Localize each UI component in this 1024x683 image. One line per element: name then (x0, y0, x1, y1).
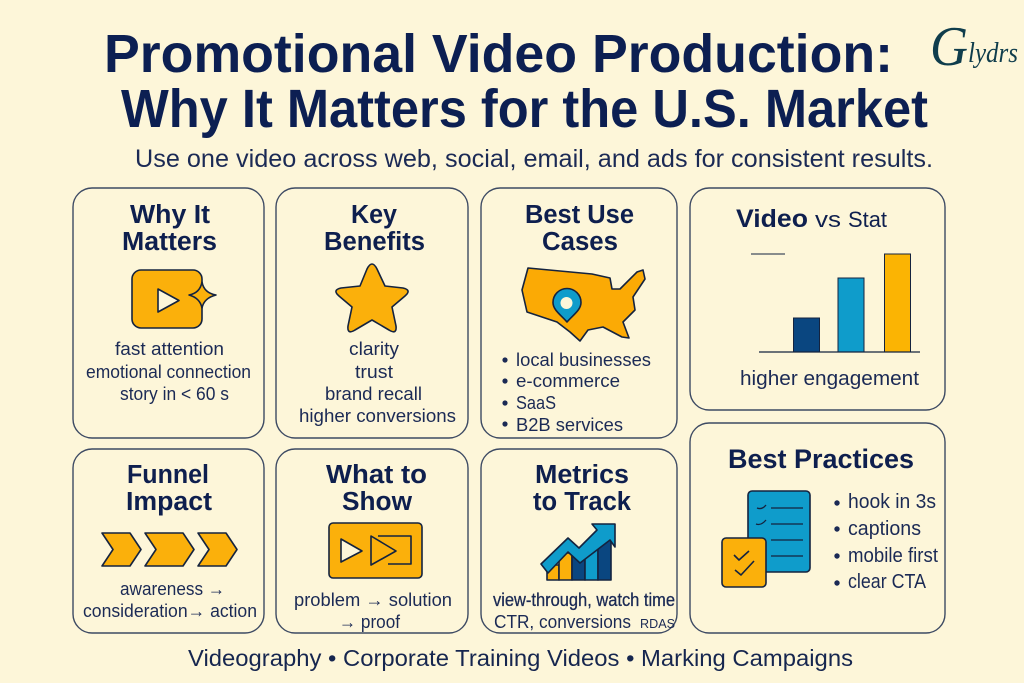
list: best practices: captions (848, 518, 921, 540)
subtitle: Use one video across web, social, email, and ads for consistent results. (135, 145, 933, 173)
logo: G (930, 16, 968, 78)
text: why it matters list (86, 339, 251, 404)
list: use cases (502, 350, 651, 435)
panel: best practices (690, 423, 945, 633)
text: metrics list: CTR, conversions (494, 612, 631, 632)
list: best practices (834, 491, 938, 593)
panel: funnel impact (73, 449, 264, 633)
icon: growth chart (541, 524, 615, 580)
caption: higher engagement: higher engagement (740, 368, 919, 390)
heading: key benefits: Benefits (324, 228, 425, 256)
heading: video vs static: vs (815, 207, 841, 232)
panel: video vs static (690, 188, 945, 410)
bar chart (751, 254, 920, 352)
text: key benefits list: clarity (349, 339, 399, 359)
panel: key benefits (276, 188, 468, 438)
list: use cases: local businesses (516, 350, 651, 370)
heading: best practices: Best Practices (728, 444, 914, 474)
heading: metrics to track: Metrics (535, 461, 629, 489)
list: best practices: mobile first (848, 545, 938, 567)
text: why it matters list: fast attention (115, 339, 224, 359)
heading: key benefits: Key (351, 201, 398, 229)
logo (930, 16, 1018, 78)
heading: best use cases: Best Use (525, 201, 634, 229)
list: best practices: hook in 3s (848, 491, 936, 513)
list: use cases: SaaS (516, 393, 556, 413)
text: what to show: → proof (339, 612, 401, 632)
panel: what to show (276, 449, 468, 633)
text: what to show (294, 590, 452, 632)
icon: chevrons (102, 533, 237, 566)
panel: best use cases (481, 188, 677, 438)
text: metrics list (493, 590, 675, 632)
heading: video vs static (736, 205, 887, 233)
icon: video frames (329, 523, 422, 578)
text: key benefits list: higher conversions (299, 406, 456, 426)
heading: why it matters (122, 201, 217, 256)
heading: funnel impact: Funnel (127, 461, 209, 489)
text: metrics list: RDAS (640, 616, 675, 631)
heading: key benefits (324, 201, 425, 256)
text: why it matters list: story in < 60 s (120, 384, 229, 404)
text: key benefits list (299, 339, 456, 426)
heading: what to show (326, 461, 427, 516)
icon: star (336, 264, 408, 332)
list: best practices: clear CTA (848, 571, 927, 593)
icon: checklist documents (722, 491, 810, 587)
heading: best use cases (525, 201, 634, 256)
text: why it matters list: emotional connection (86, 362, 251, 382)
heading: why it matters: Matters (122, 228, 217, 256)
title: Promotional Video Production: (104, 24, 893, 84)
icon: video play with sparkle (132, 270, 216, 328)
text: metrics list: view-through, watch time (493, 590, 675, 610)
text: funnel stages: awareness → (120, 579, 225, 599)
heading: why it matters: Why It (130, 201, 211, 229)
heading: metrics to track (533, 461, 632, 516)
heading: best use cases: Cases (542, 228, 618, 256)
heading: video vs static: Stat (848, 207, 887, 232)
heading: video vs static: Video (736, 205, 808, 233)
list: use cases: B2B services (516, 415, 623, 435)
title (104, 24, 928, 139)
text: funnel stages: consideration→ action (83, 601, 257, 621)
icon: US map with pin (522, 268, 645, 341)
panel: why it matters (73, 188, 264, 438)
heading: metrics to track: to Track (533, 488, 632, 516)
text: funnel stages (83, 579, 257, 621)
list: use cases: e-commerce (516, 371, 620, 391)
text: key benefits list: brand recall (325, 384, 422, 404)
text: key benefits list: trust (355, 362, 393, 382)
title: Why It Matters for the U.S. Market (121, 79, 928, 139)
panel: metrics to track (481, 449, 677, 633)
heading: what to show: What to (326, 461, 427, 489)
text: what to show: problem → solution (294, 590, 452, 610)
heading: funnel impact: Impact (126, 488, 213, 516)
heading: funnel impact (126, 461, 213, 516)
footer: Videography • Corporate Training Videos • Marking Campaigns (188, 645, 853, 671)
heading: what to show: Show (342, 488, 412, 516)
